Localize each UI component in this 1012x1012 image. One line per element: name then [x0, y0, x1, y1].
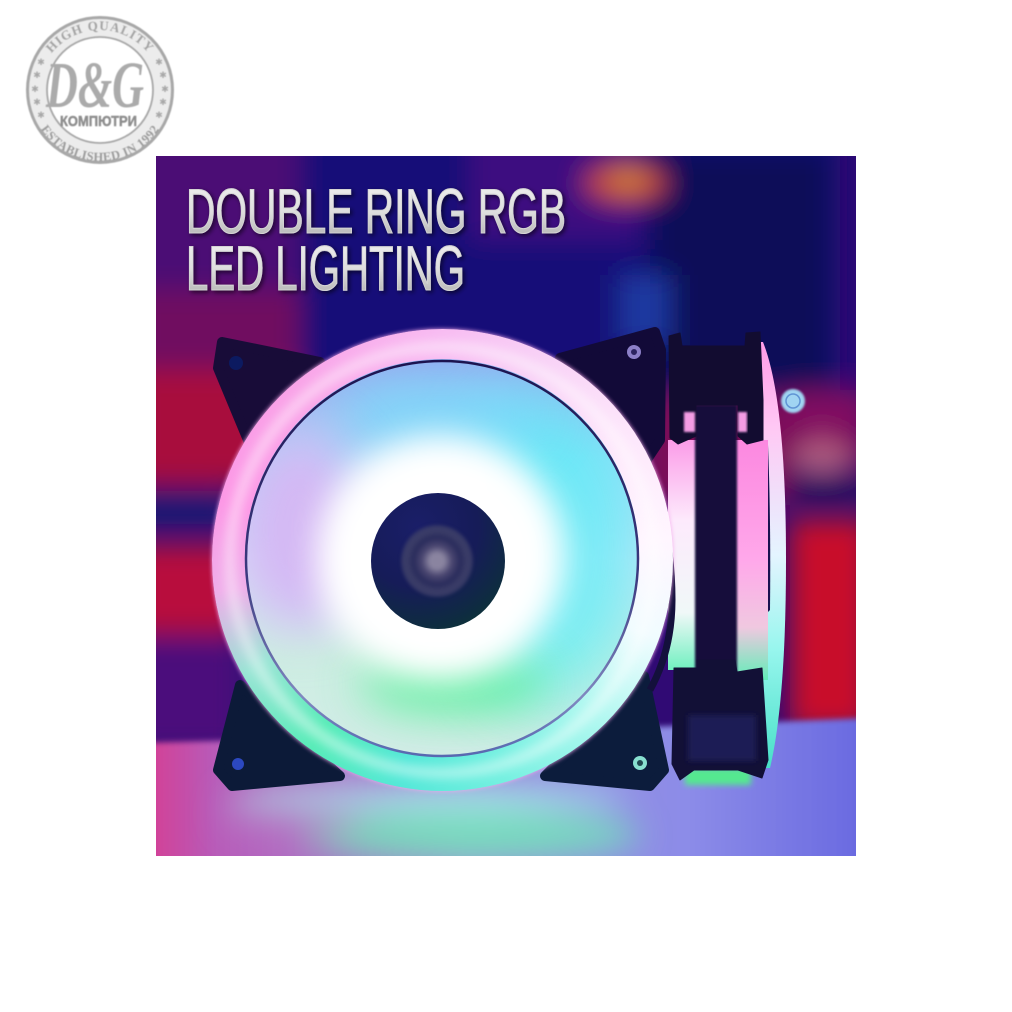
logo: D&G seal: ✱: [159, 71, 167, 81]
title: double ring RGB LED lighting: LED LIGHTING: [186, 234, 465, 304]
logo: D&G seal: ✱: [31, 85, 39, 95]
logo: D&G seal: ✱: [155, 58, 163, 68]
background: blurred room: [156, 156, 856, 856]
second fan: side view: [668, 332, 806, 789]
logo: D&G seal: КОМПЮТРИ: [60, 113, 137, 130]
logo: D&G seal: ✱: [155, 111, 163, 121]
logo: D&G seal: HIGH QUALITY: [45, 20, 154, 54]
panel: fan photo: [156, 156, 856, 856]
main fan: light ring: [212, 329, 673, 791]
main fan: disc rim: [244, 360, 640, 758]
title: double ring RGB LED lighting: DOUBLE RING RGB: [186, 177, 566, 247]
main fan: corners: [213, 327, 676, 791]
logo: D&G seal: ✱: [37, 58, 45, 68]
logo: D&G seal: ESTABLISHED IN 1992: [40, 124, 159, 162]
main fan: ring LED highlight: [220, 338, 638, 784]
logo: D&G seal: ✱: [37, 111, 45, 121]
logo: D&G seal: ✱: [33, 71, 41, 81]
main fan: inner disc: [245, 359, 639, 756]
logo: D&G seal: ✱: [159, 98, 167, 108]
title: double ring RGB LED lighting: [186, 177, 569, 304]
main fan: hub: [371, 493, 505, 629]
logo: D&G seal: [26, 16, 174, 164]
logo: D&G seal: ✱: [161, 85, 169, 95]
logo: D&G seal: D&G: [45, 49, 144, 122]
logo: D&G seal: ✱: [33, 98, 41, 108]
